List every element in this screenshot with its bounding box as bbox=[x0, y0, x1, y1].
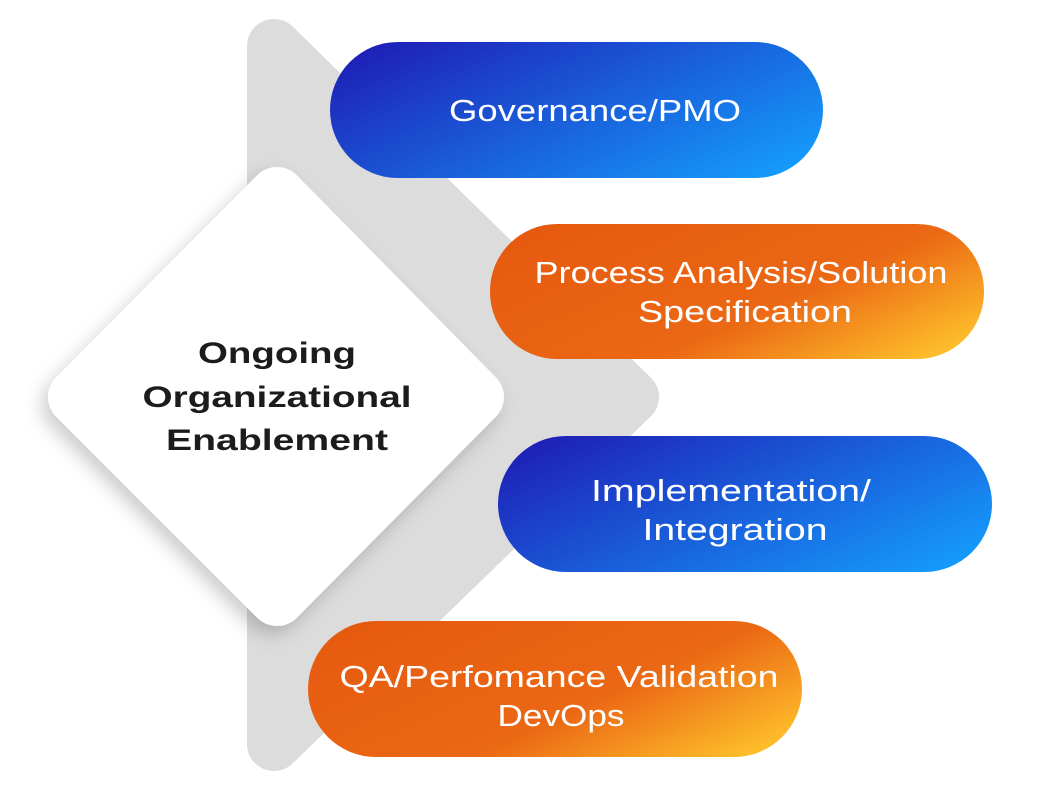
title text: Ongoing bbox=[198, 337, 356, 370]
pill: Implementation: Integration bbox=[642, 512, 828, 547]
pill: Governance/PMO: Governance/PMO bbox=[449, 93, 741, 128]
pill: Process Analysis: Specification bbox=[638, 294, 852, 329]
white diamond with title bbox=[76, 195, 476, 598]
pill: Implementation: Implementation/ bbox=[591, 473, 871, 508]
title text: Organizational bbox=[142, 381, 412, 414]
title text: Enablement bbox=[166, 424, 388, 457]
pill: Process Analysis bbox=[490, 224, 984, 359]
pill: Implementation bbox=[498, 436, 992, 572]
pill: Process Analysis: Process Analysis/Solution bbox=[534, 255, 948, 290]
pill: Governance/PMO bbox=[330, 42, 823, 178]
pill: QA: DevOps bbox=[498, 698, 624, 733]
pill: QA bbox=[308, 621, 802, 757]
gray arrow background bbox=[274, 46, 632, 744]
pill: QA: QA/Perfomance Validation bbox=[340, 659, 778, 694]
